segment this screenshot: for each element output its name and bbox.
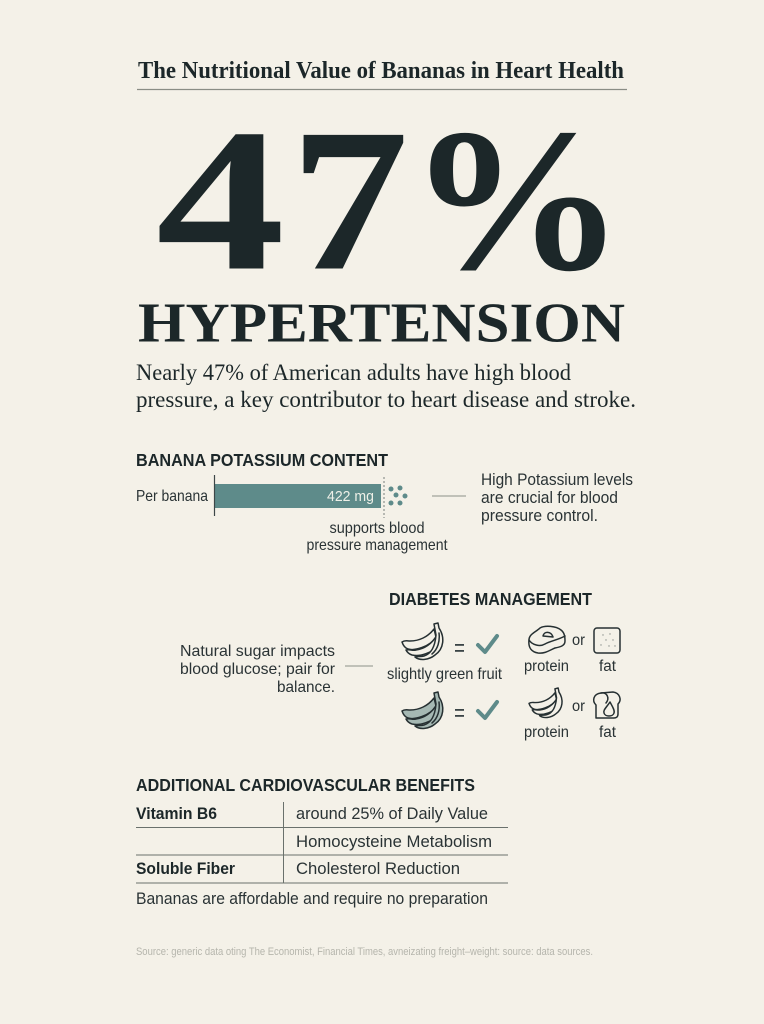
potassium note: [481, 470, 633, 525]
benefits table: Cholesterol Reduction: [296, 859, 460, 878]
icon: check mark: [478, 636, 497, 652]
or label: or: [572, 698, 585, 715]
diabetes note: balance.: [277, 679, 335, 696]
hypertension heading: HYPERTENSION: [138, 292, 625, 354]
big statistic: [156, 88, 625, 314]
benefits note: Bananas are affordable and require no preparation: [136, 889, 488, 908]
panel: diabetes management: [180, 589, 620, 741]
big statistic: 7: [290, 88, 409, 314]
icon: potassium dots: [388, 486, 408, 506]
benefits table: around 25% of Daily Value: [296, 804, 488, 823]
source note: Source: generic data oting The Economist, Financial Times, avneizating freight–weight: source: data sources.: [136, 946, 593, 958]
potassium bar: 422 mg: [327, 488, 374, 505]
protein label: protein: [524, 658, 569, 675]
title: The Nutritional Value of Bananas in Heart Health: [138, 58, 624, 84]
supports caption: [306, 520, 448, 554]
connector line: [432, 495, 466, 497]
big statistic: %: [408, 88, 625, 314]
big statistic: 4: [156, 88, 285, 314]
intro text: Nearly 47% of American adults have high blood: [136, 360, 571, 386]
panel: additional cardiovascular benefits: [136, 775, 508, 908]
fat label: fat: [599, 658, 617, 675]
panel: banana potassium content: [136, 450, 633, 554]
icon: ripe banana filled: [402, 692, 443, 728]
diabetes note: Natural sugar impacts: [180, 643, 335, 660]
or label: or: [572, 632, 585, 649]
benefits table: [136, 802, 508, 883]
slightly green fruit label: slightly green fruit: [387, 666, 503, 683]
equals sign: [455, 644, 464, 652]
potassium bar: [214, 475, 384, 518]
icon: bread: [594, 692, 620, 718]
potassium note: High Potassium levels: [481, 470, 633, 489]
protein label: protein: [524, 724, 569, 741]
icon: fat square: [594, 628, 620, 653]
intro text: [136, 360, 636, 413]
benefits table: Vitamin B6: [136, 804, 217, 823]
icon: protein: [529, 626, 565, 653]
supports caption: supports blood: [330, 520, 424, 537]
diabetes note: [180, 643, 336, 696]
per banana label: Per banana: [136, 488, 208, 505]
icon: check mark: [478, 702, 497, 718]
icon: green banana outline: [402, 623, 443, 659]
supports caption: pressure management: [306, 537, 448, 554]
connector line: [345, 665, 373, 667]
icon: small banana: [529, 688, 562, 718]
benefits table: Soluble Fiber: [136, 859, 235, 878]
potassium note: pressure control.: [481, 506, 598, 525]
fat label: fat: [599, 724, 617, 741]
benefits heading: ADDITIONAL CARDIOVASCULAR BENEFITS: [136, 775, 475, 795]
benefits table: Homocysteine Metabolism: [296, 832, 492, 851]
diabetes note: blood glucose; pair for: [180, 661, 336, 678]
potassium note: are crucial for blood: [481, 488, 618, 507]
potassium heading: BANANA POTASSIUM CONTENT: [136, 450, 388, 470]
intro text: pressure, a key contributor to heart disease and stroke.: [136, 387, 636, 413]
diabetes heading: DIABETES MANAGEMENT: [389, 589, 592, 609]
equals sign: [455, 709, 464, 717]
